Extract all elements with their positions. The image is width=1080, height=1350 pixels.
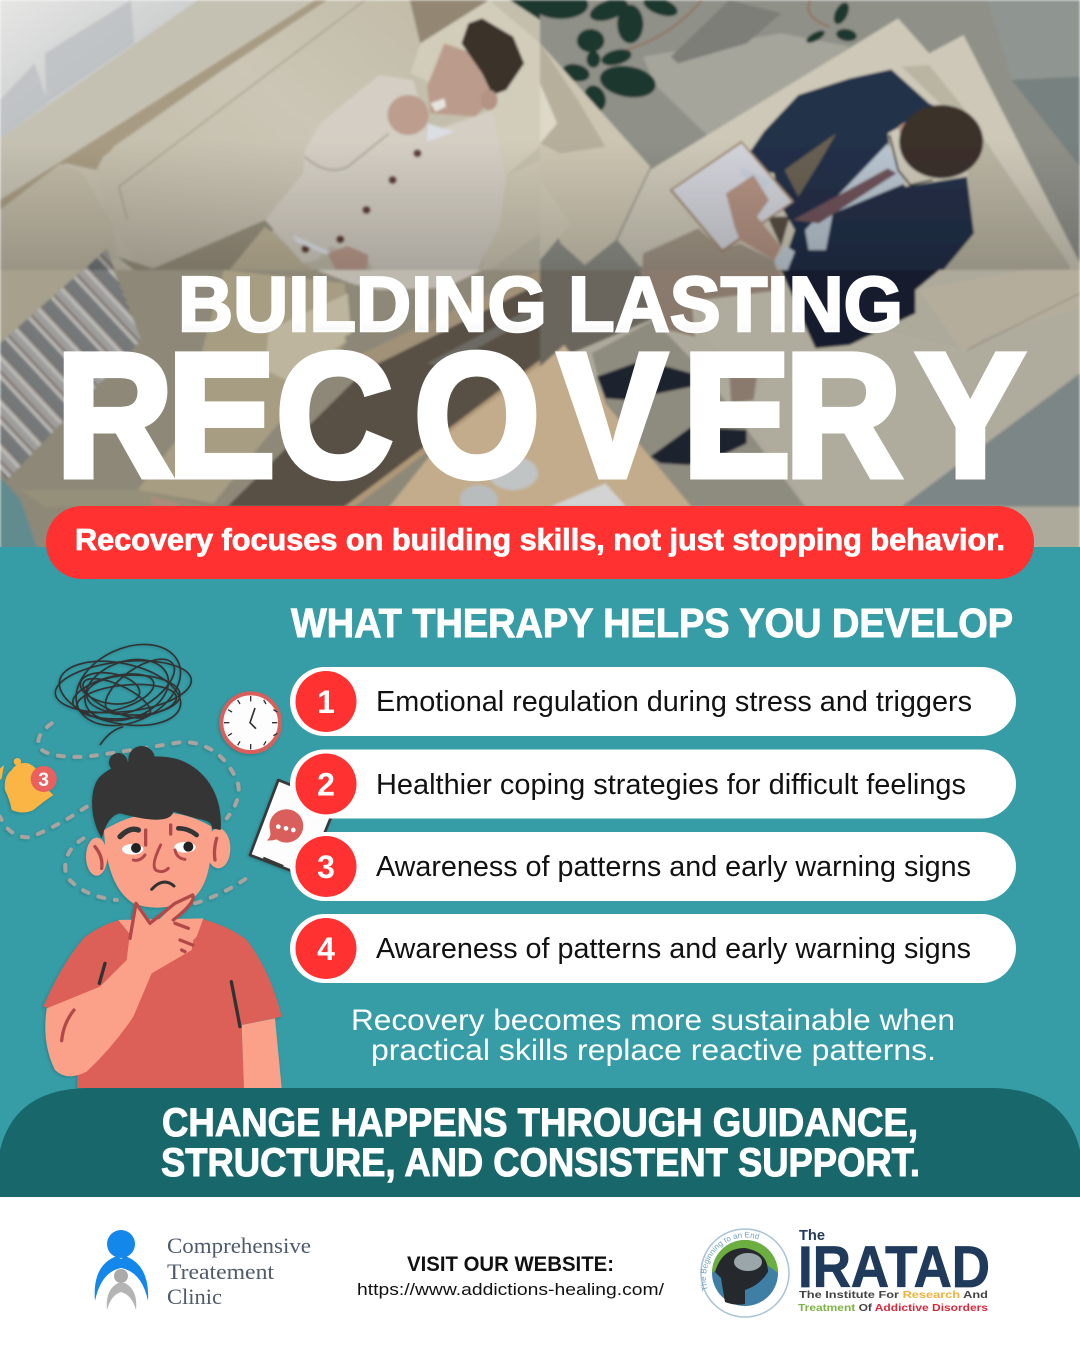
logo: iratad: IRATAD — [798, 1235, 990, 1300]
icon: notification bell — [0, 758, 57, 812]
teal content panel — [0, 547, 1080, 1197]
logo: iratad — [700, 1227, 990, 1318]
list item 3: Awareness of patterns and early warning signs — [376, 851, 971, 883]
list item 2: Healthier coping strategies for difficult feelings — [376, 769, 966, 801]
red subtitle banner — [46, 506, 1034, 579]
man: raised arm and hand — [45, 895, 282, 1088]
list item 1: Emotional regulation during stress and triggers — [376, 686, 972, 718]
list item 3 — [290, 832, 1016, 901]
illustration: stressed man thinking — [0, 629, 337, 1088]
dark teal closing banner: STRUCTURE, AND CONSISTENT SUPPORT. — [161, 1141, 920, 1185]
dashed thought trails — [0, 723, 253, 903]
man: shirt — [43, 919, 282, 1088]
logo: iratad: Treatment Of Addictive Disorders — [798, 1302, 988, 1314]
icon: notification bell: 3 — [38, 770, 49, 791]
numbered skill list — [290, 667, 1016, 983]
man: head — [86, 746, 230, 908]
website call to action — [357, 1253, 664, 1299]
logo: iratad: The Beginning to an End — [700, 1232, 760, 1292]
supporting statement: practical skills replace reactive patterns. — [371, 1034, 936, 1067]
logo: comprehensive treatement clinic — [95, 1230, 311, 1310]
logo: comprehensive treatement clinic: Treatement — [167, 1259, 274, 1284]
supporting statement — [351, 1004, 955, 1067]
list item 1 — [290, 667, 1016, 736]
man: outline details — [62, 895, 193, 1041]
list item 4: 4 — [317, 931, 335, 967]
list item 4 — [290, 914, 1016, 983]
section heading: WHAT THERAPY HELPS YOU DEVELOP — [291, 600, 1013, 646]
list item 2: 2 — [317, 766, 335, 802]
dark teal closing banner — [0, 1088, 1080, 1197]
logo: iratad: The Institute For Research And — [799, 1289, 988, 1301]
logo: comprehensive treatement clinic: Clinic — [167, 1284, 222, 1309]
supporting statement: Recovery becomes more sustainable when — [351, 1004, 955, 1037]
title line: recovery: RECOVERY — [56, 317, 1024, 513]
man: neck — [118, 918, 203, 947]
main title — [56, 260, 1024, 513]
list item 2 — [290, 750, 1016, 818]
red subtitle banner: Recovery focuses on building skills, not just stopping behavior. — [75, 522, 1005, 557]
website call to action: VISIT OUR WEBSITE: — [407, 1253, 614, 1276]
logo: iratad: The — [799, 1227, 825, 1244]
list item 4: Awareness of patterns and early warning signs — [376, 933, 971, 965]
dark teal closing banner: CHANGE HAPPENS THROUGH GUIDANCE, — [162, 1101, 918, 1145]
icon: phone with chat bubble — [250, 780, 337, 877]
background photo: therapist and client on sofas — [0, 0, 1080, 550]
website call to action: https://www.addictions-healing.com/ — [357, 1280, 664, 1299]
logo: comprehensive treatement clinic: Comprehensive — [167, 1233, 311, 1258]
scribble thought cloud — [53, 629, 194, 745]
footer — [0, 1197, 1080, 1350]
icon: wall clock — [221, 693, 280, 752]
title line: building lasting: BUILDING LASTING — [178, 260, 903, 348]
list item 3: 3 — [317, 849, 335, 885]
list item 1: 1 — [317, 684, 335, 720]
